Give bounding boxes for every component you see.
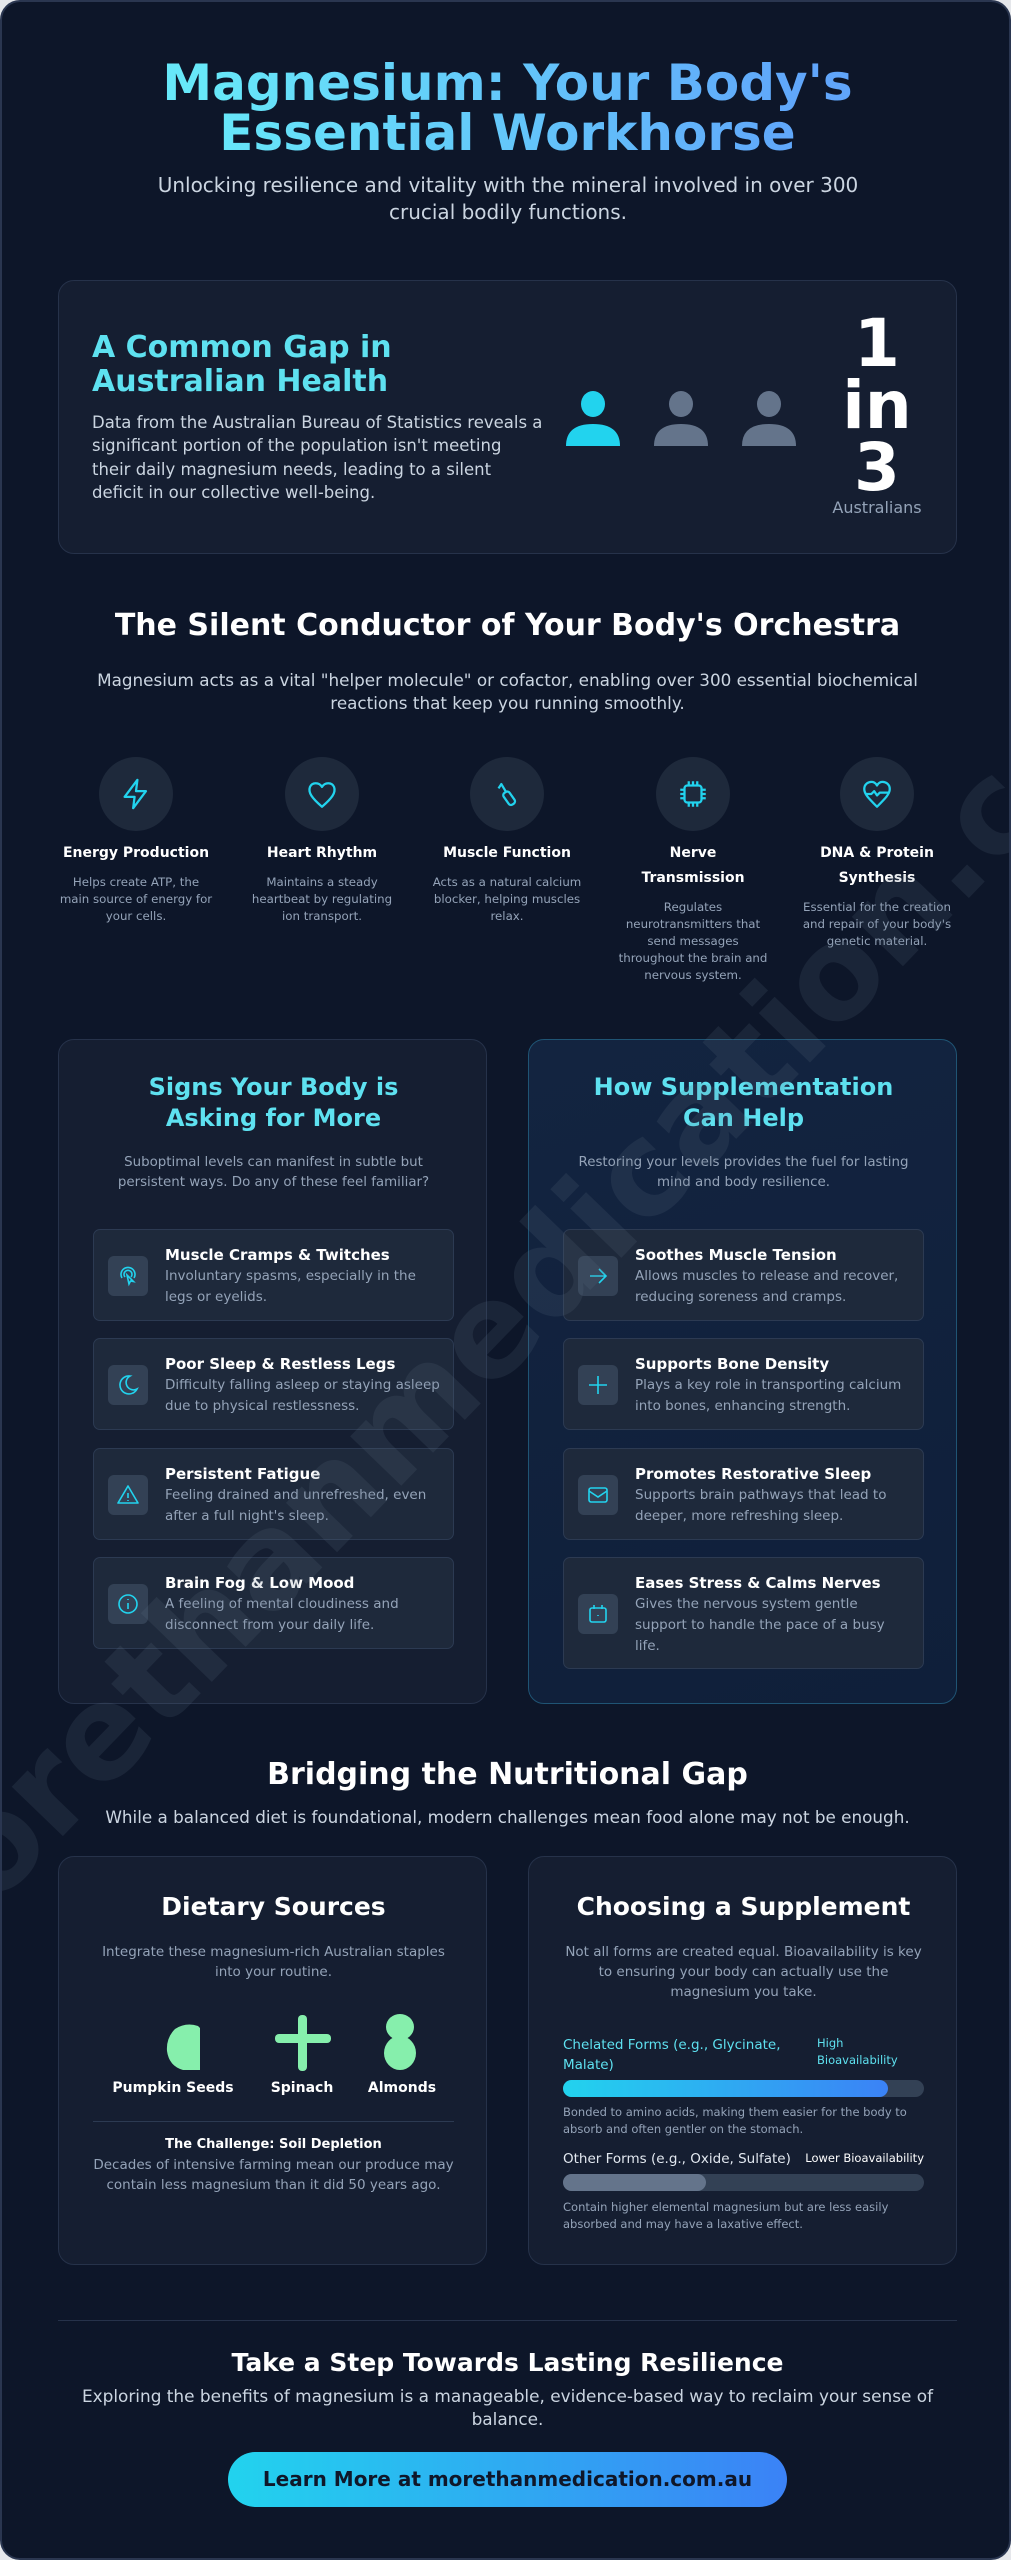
function: DNA: Synthesis: [839, 870, 915, 886]
text block: signs intro: Suboptimal levels can manifest in subtle but persistent ways. Do any of these feel familiar?: [118, 1155, 429, 1190]
text block: ABS data: [92, 413, 542, 502]
item: cramps: [93, 1229, 454, 1321]
item: cramps: Muscle Cramps & Twitches: [165, 1246, 390, 1264]
function: DNA: [803, 757, 951, 948]
item: fatigue: Persistent Fatigue: [165, 1465, 320, 1483]
function: nerve: Transmission: [641, 870, 745, 886]
heading: common gap: Australian Health: [92, 364, 388, 399]
function: heart: Maintains a steady heartbeat by regulating ion transport.: [252, 875, 392, 923]
heading: silent conductor: The Silent Conductor of Your Body's Orchestra: [115, 608, 900, 643]
stat: 1 in 3: 1: [854, 305, 900, 382]
function: energy: main source of energy for: [60, 892, 212, 906]
item: fatigue: Feeling drained and unrefreshed, even after a full night's sleep.: [165, 1487, 426, 1524]
item: muscle tension: Soothes Muscle Tension: [635, 1246, 837, 1264]
text block: ABS data: deficit in our collective well-being.: [92, 483, 375, 502]
panel: choosing supplement: [528, 1856, 957, 2265]
text block: choosing intro: Not all forms are created equal. Bioavailability is key to ensuring your body can actually use the magnesium you take.: [565, 1944, 922, 2000]
item: stress: Eases Stress & Calms Nerves: [635, 1574, 881, 1592]
heading: common gap: [92, 330, 392, 399]
function: nerve: [618, 757, 767, 982]
item: stress: [563, 1557, 924, 1669]
function: energy: Energy Production: [63, 845, 209, 861]
item: stress: Gives the nervous system gentle support to handle the pace of a busy life.: [635, 1596, 885, 1654]
title: Essential Workhorse: [219, 104, 796, 162]
heading: common gap: A Common Gap in: [92, 330, 392, 365]
labels: foods: Pumpkin Seeds: [112, 2080, 234, 2096]
item: restorative sleep: Promotes Restorative Sleep: [635, 1465, 871, 1483]
icon: people 1 in 3: [566, 391, 796, 446]
item: fatigue: [93, 1448, 454, 1540]
panel: dietary sources: Spinach: [271, 2080, 333, 2096]
button: learn more: Learn More at morethanmedication.com.au: [263, 2467, 752, 2491]
text block: conductor intro: Magnesium acts as a vital "helper molecule" or cofactor, enabling over 300 essential biochemical reactions that keep you running smoothly.: [97, 670, 918, 713]
title: [2, 58, 1011, 158]
item: brain fog: Brain Fog & Low Mood: [165, 1574, 354, 1592]
function: nerve: Nerve: [670, 845, 716, 861]
function: energy: your cells.: [106, 909, 166, 923]
text block: supplementation intro: Restoring your levels provides the fuel for lasting mind and body resilience.: [579, 1155, 908, 1190]
function: muscle: Muscle Function: [443, 845, 571, 861]
text block: dietary intro: Integrate these magnesium-rich Australian staples into your routine.: [102, 1944, 445, 1980]
heading: signs: [149, 1073, 398, 1132]
panel: signs: [58, 1039, 487, 1704]
bar chart: bioavailability: Chelated Forms (e.g., Glycinate, Malate): [563, 2037, 781, 2073]
bar chart: bioavailability: Lower Bioavailability: [805, 2151, 924, 2165]
text block: ABS data: Data from the Australian Bureau of Statistics reveals a: [92, 413, 542, 432]
item: restorative sleep: Supports brain pathways that lead to deeper, more refreshing sleep.: [635, 1487, 886, 1524]
function: muscle: Acts as a natural calcium blocker, helping muscles relax.: [433, 875, 581, 923]
item: bone density: [563, 1338, 924, 1430]
icon: muscle: [470, 757, 544, 831]
item: muscle tension: [563, 1229, 924, 1321]
item: sleep: [93, 1338, 454, 1430]
stat: 1 in 3: 3: [854, 429, 900, 506]
heading: bridging: Bridging the Nutritional Gap: [267, 1757, 748, 1792]
heading: choosing: Choosing a Supplement: [577, 1892, 910, 1921]
bar chart: bioavailability: High: [817, 2036, 843, 2050]
item: muscle tension: Allows muscles to release and recover, reducing soreness and cramps.: [635, 1268, 898, 1305]
heading: signs: Signs Your Body is: [149, 1073, 398, 1101]
heading: call to action: Take a Step Towards Lasting Resilience: [231, 2348, 784, 2377]
item: bone density: Supports Bone Density: [635, 1355, 829, 1373]
function: DNA: DNA & Protein: [820, 845, 934, 861]
function: muscle: [432, 757, 581, 923]
function: heart: Heart Rhythm: [267, 845, 377, 861]
function: energy: Helps create ATP, the: [73, 875, 199, 889]
bar chart: bioavailability: Bioavailability: [817, 2053, 898, 2067]
heading: signs: Asking for More: [166, 1104, 381, 1132]
function: energy: [60, 757, 212, 923]
text block: cta: Exploring the benefits of magnesium is a manageable, evidence-based way to reclaim your sense of balance.: [82, 2386, 933, 2429]
text block: ABS data: their daily magnesium needs, leading to a silent: [92, 460, 491, 479]
heading: dietary: Dietary Sources: [161, 1892, 386, 1921]
stat: 1 in 3: [842, 305, 912, 506]
stat label: Australians: [832, 498, 922, 517]
bar chart: bioavailability: Contain higher elemental magnesium but are less easily absorbed and may have a laxative effect.: [563, 2200, 888, 2231]
item: brain fog: A feeling of mental cloudiness and disconnect from your daily life.: [165, 1596, 399, 1633]
heading: supplementation: Can Help: [683, 1104, 804, 1132]
function: DNA: Essential for the creation and repair of your body's genetic material.: [803, 900, 951, 948]
callout: soil depletion: The Challenge: Soil Depletion: [165, 2137, 382, 2152]
text block: bridging intro: While a balanced diet is foundational, modern challenges mean food alone may not be enough.: [105, 1807, 910, 1827]
item: sleep: Difficulty falling asleep or staying asleep due to physical restlessness.: [165, 1377, 440, 1414]
item: cramps: Involuntary spasms, especially in the legs or eyelids.: [165, 1268, 416, 1305]
icon: lightning: [99, 757, 173, 831]
function: heart: [252, 757, 392, 923]
heading: supplementation: How Supplementation: [594, 1073, 893, 1101]
item: sleep: Poor Sleep & Restless Legs: [165, 1355, 395, 1373]
title: Magnesium: Your Body's: [162, 54, 853, 112]
item: bone density: Plays a key role in transporting calcium into bones, enhancing strength.: [635, 1377, 901, 1414]
heading: supplementation: [594, 1073, 893, 1132]
panel: supplementation: [528, 1039, 957, 1704]
bar chart: bioavailability: Other Forms (e.g., Oxide, Sulfate): [563, 2151, 791, 2167]
bar chart: bioavailability: Bonded to amino acids, making them easier for the body to absorb and often gentler on the stomach.: [563, 2105, 907, 2136]
panel: common gap: [58, 280, 957, 554]
icon: heart: [285, 757, 359, 831]
stat: 1 in 3: in: [842, 367, 912, 444]
icon: chip: [656, 757, 730, 831]
bar chart: bioavailability: [563, 2036, 924, 2231]
icons: foods: [166, 2014, 416, 2071]
item: brain fog: [93, 1557, 454, 1649]
callout: soil depletion: Decades of intensive farming mean our produce may contain less magnesium than it did 50 years ago.: [93, 2157, 454, 2193]
icon: heart pulse: [840, 757, 914, 831]
panel: dietary sources: [58, 1856, 487, 2265]
panel: dietary sources: Almonds: [368, 2080, 436, 2096]
subtitle: Unlocking resilience and vitality with the mineral involved in over 300 crucial bodily functions.: [158, 173, 858, 224]
callout: soil depletion: [93, 2137, 454, 2193]
function: nerve: Regulates neurotransmitters that send messages throughout the brain and nervous system.: [619, 900, 767, 982]
text block: ABS data: significant portion of the population isn't meeting: [92, 436, 501, 455]
button: learn more: [228, 2452, 787, 2507]
item: restorative sleep: [563, 1448, 924, 1540]
